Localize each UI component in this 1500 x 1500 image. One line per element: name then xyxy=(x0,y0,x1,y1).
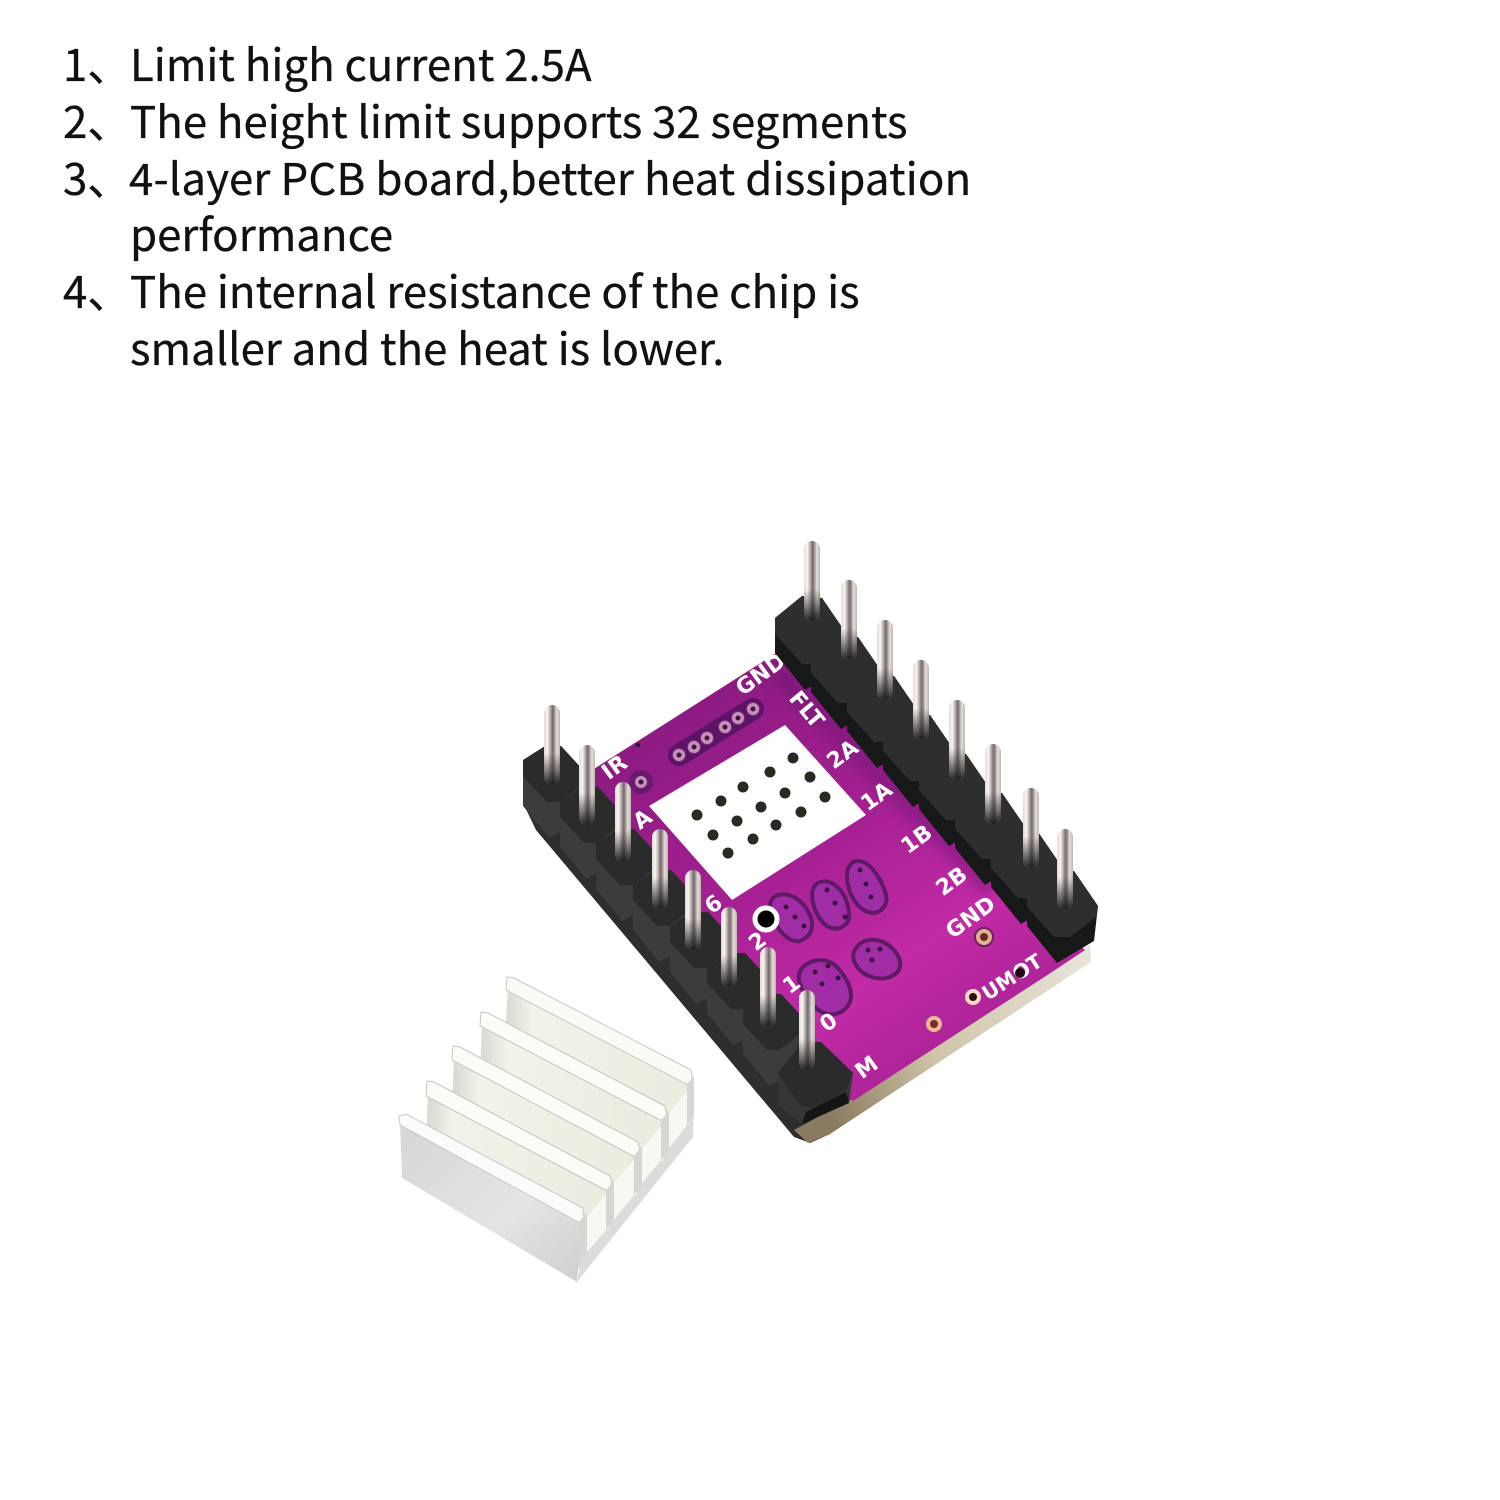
feature list xyxy=(63,30,971,378)
feature 3 continuation: performance xyxy=(130,200,393,264)
stepper driver board xyxy=(523,541,1098,1143)
left block 1 xyxy=(523,746,585,838)
silkscreen pin labels: GND xyxy=(732,649,790,701)
silkscreen pin labels: 2B xyxy=(932,862,972,902)
silkscreen pin labels: 6 xyxy=(700,890,728,920)
pin 8 xyxy=(1057,829,1073,909)
ring test point xyxy=(755,908,777,930)
via strip xyxy=(672,702,760,762)
silkscreen pin labels xyxy=(597,649,1047,1085)
pad holes xyxy=(784,868,882,986)
silkscreen pin labels: 1 xyxy=(778,970,806,1000)
feature 2: 2、 xyxy=(63,87,131,151)
purple PCB surface xyxy=(545,652,1085,1101)
feature 3 text: 4-layer PCB board,better heat dissipation xyxy=(129,144,971,208)
left pin 3 xyxy=(615,782,631,862)
left pin 2 xyxy=(579,745,595,825)
pin 4 xyxy=(913,660,929,740)
feature 1: 1、 xyxy=(63,30,131,94)
heat sink base side xyxy=(577,1105,694,1282)
pin 2 xyxy=(841,580,857,660)
silkscreen pin labels: GND xyxy=(942,892,1000,944)
notches between fins xyxy=(587,1091,687,1252)
silkscreen pin labels: 0 xyxy=(815,1008,843,1038)
board edge: dark left side xyxy=(524,775,860,1143)
left block 7 xyxy=(743,994,805,1086)
header block 5 xyxy=(919,752,990,846)
left pin 4 xyxy=(652,829,668,909)
patch drill holes xyxy=(692,752,830,858)
silkscreen pin labels: 2A xyxy=(823,735,863,775)
left header row xyxy=(523,705,853,1124)
right header row xyxy=(775,541,1098,963)
left block 8 xyxy=(778,1042,853,1124)
third fin xyxy=(452,1046,641,1196)
silkscreen pin labels: IR xyxy=(597,750,633,786)
left pin 5 xyxy=(685,870,701,950)
silkscreen pin labels: FLT xyxy=(783,686,829,734)
feature 4 continuation: smaller and the heat is lower. xyxy=(130,314,724,378)
feature 4: 4、 xyxy=(63,257,131,321)
component pads xyxy=(770,861,900,1014)
header block 6 xyxy=(955,791,1026,885)
silkscreen pin labels: 2 xyxy=(744,927,772,957)
back fin xyxy=(505,977,693,1125)
white label patch xyxy=(649,725,866,900)
header block 3 xyxy=(847,674,918,768)
pin 5 xyxy=(949,700,965,780)
header block 1 xyxy=(775,596,846,690)
pin 6 xyxy=(985,744,1001,824)
left pin 7 xyxy=(760,947,776,1027)
left block 3 xyxy=(596,829,658,921)
header block 8 xyxy=(1027,869,1098,963)
header block 7 xyxy=(991,830,1062,924)
left pin 6 xyxy=(721,907,737,987)
feature 1 text: Limit high current 2.5A xyxy=(130,30,592,94)
silkscreen pin labels: M xyxy=(851,1051,883,1085)
front fin xyxy=(399,1114,584,1282)
left block 5 xyxy=(670,912,732,1004)
silkscreen pin labels: 1B xyxy=(897,820,937,860)
fourth fin xyxy=(426,1081,613,1232)
left block 4 xyxy=(633,870,695,962)
feature 2 text: The height limit supports 32 segments xyxy=(130,87,908,151)
pin 3 xyxy=(877,620,893,700)
left pin 1 xyxy=(544,705,560,785)
copper vias xyxy=(926,928,1025,1032)
feature 4 text: The internal resistance of the chip is xyxy=(130,257,860,321)
aluminium heat sink xyxy=(399,977,694,1282)
left block 6 xyxy=(707,953,769,1045)
darker purple shadow by right header xyxy=(770,665,1000,895)
left block 2 xyxy=(560,787,622,879)
silkscreen pin labels: A xyxy=(629,805,657,835)
pin 1 xyxy=(804,541,820,621)
board edge: tan lower side xyxy=(794,945,1091,1143)
header block 4 xyxy=(883,713,954,807)
header block 2 xyxy=(811,635,882,729)
silkscreen pin labels: 1A xyxy=(857,777,897,817)
silkscreen pin labels: UMOT xyxy=(977,949,1047,1005)
via near DIR xyxy=(629,743,653,794)
left pin 8 xyxy=(799,990,815,1070)
feature 3: 3、 xyxy=(63,144,131,208)
fin end walls xyxy=(578,1076,694,1270)
second fin xyxy=(480,1012,668,1162)
pin 7 xyxy=(1023,788,1039,868)
